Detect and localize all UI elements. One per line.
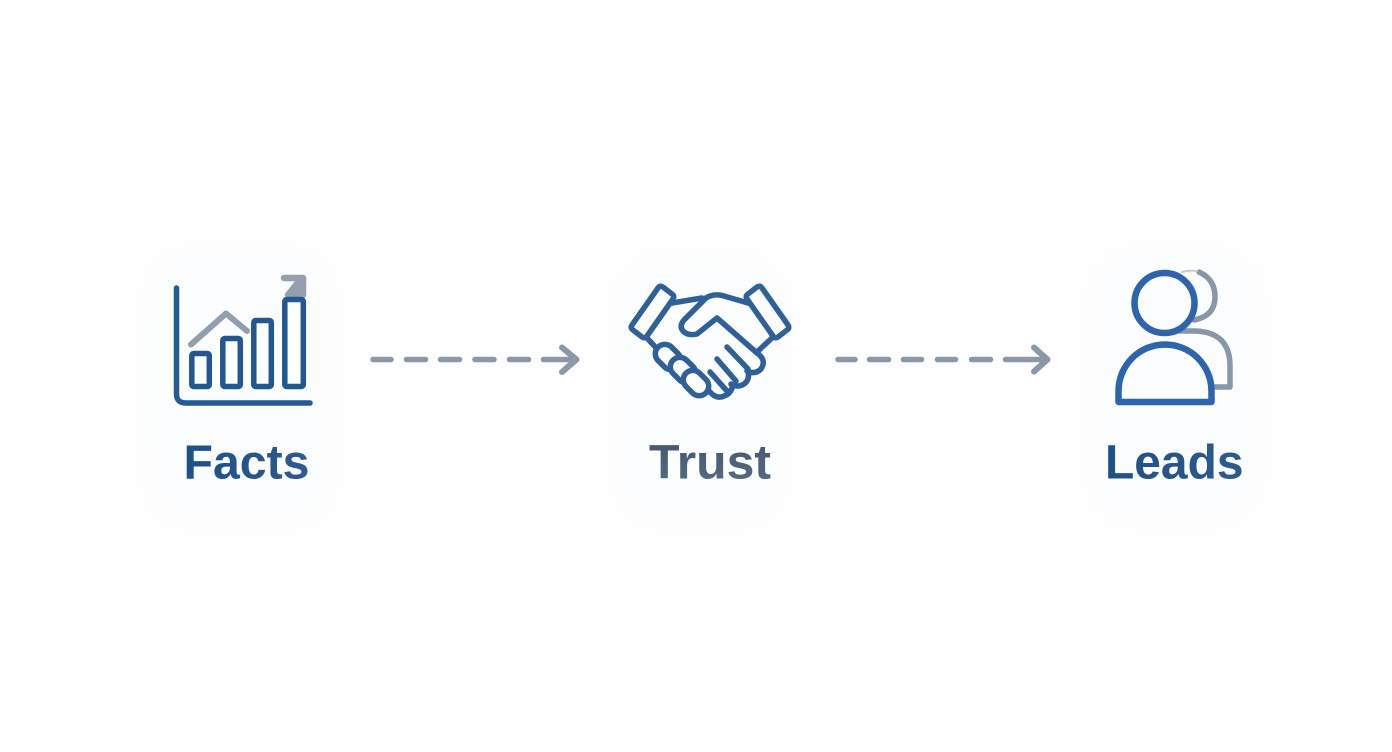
right hand and thumb [681, 295, 772, 397]
finger lines [710, 347, 748, 391]
main person body [1118, 344, 1212, 402]
icon: bar chart with rising arrow [176, 278, 310, 403]
step: Leads [1105, 271, 1244, 490]
step: Facts [176, 278, 310, 490]
step: Trust [631, 286, 789, 490]
main person head [1134, 273, 1194, 333]
right cuff [746, 286, 789, 338]
arrow: trust to leads [838, 348, 1048, 372]
left cuff [631, 286, 674, 338]
fingers [651, 340, 713, 400]
secondary person, gray [1180, 272, 1230, 387]
trend line [191, 314, 247, 344]
arrow: facts to trust [373, 348, 576, 372]
label: Leads: Leads [1105, 436, 1244, 490]
label: Trust: Trust [649, 436, 771, 490]
icon: handshake [631, 286, 789, 400]
left arm top [672, 298, 702, 303]
bars [192, 300, 303, 386]
rising arrow [284, 278, 303, 295]
chart axes [176, 288, 310, 403]
left wrist [647, 338, 659, 351]
icon: people [1118, 271, 1230, 402]
label: Facts: Facts [184, 436, 310, 490]
